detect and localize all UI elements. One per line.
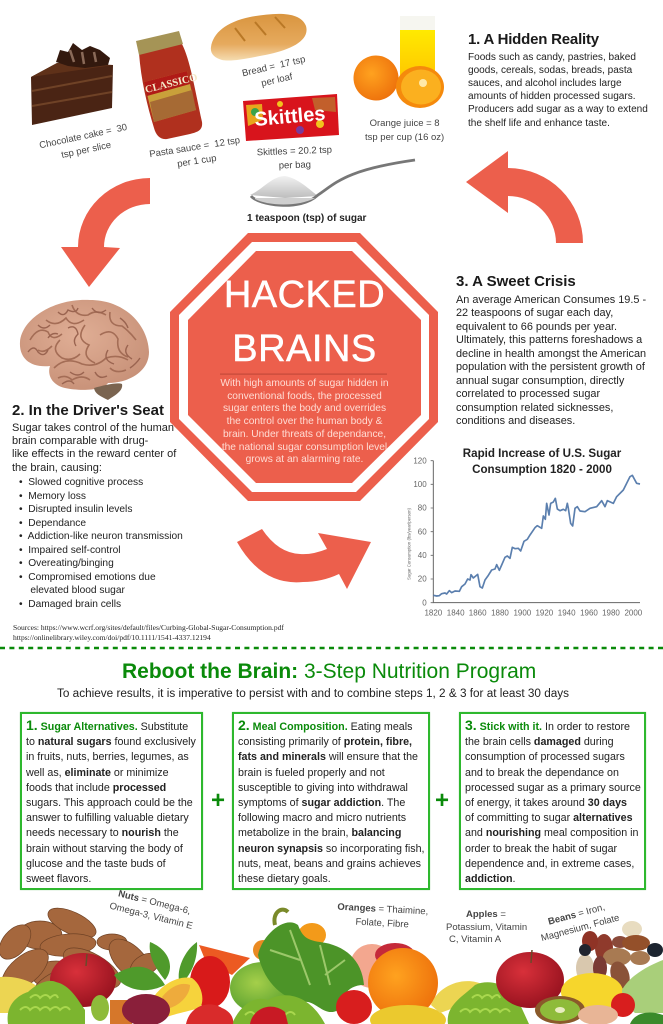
body 1: Producers add sugar as a way to extend: [468, 104, 648, 115]
heading 2: 2. In the Driver's Seat: [12, 402, 164, 419]
food image: orange juice and oranges: [354, 16, 444, 108]
line chart: US sugar consumption: 1980: [602, 609, 620, 618]
bullet list: • Compromised emotions due: [19, 572, 156, 583]
food image: skittles bag: [243, 94, 339, 141]
bullet list: • Damaged brain cells: [19, 599, 121, 610]
step 1 text: brain without starving the body of: [26, 843, 183, 855]
food: tomato: [336, 990, 372, 1024]
nutrient label: nuts: Nuts = Omega-6,: [117, 888, 192, 917]
divider: dashed green line: [0, 647, 663, 649]
bullet list: [19, 477, 183, 610]
food: almonds: [0, 902, 164, 1008]
step 3 text: consumption of processed sugars: [465, 751, 625, 763]
section 2: in the driver's seat: [12, 402, 183, 610]
step 1 text: needs necessary to nourish the: [26, 827, 179, 839]
step 3 text: addiction.: [465, 873, 515, 885]
food collage: bottom strip: [0, 902, 663, 1024]
step 3 text: [465, 717, 641, 885]
title: hacked brains: [224, 274, 385, 370]
food: red apple left: [50, 953, 116, 1007]
food: strawberry: [186, 1004, 233, 1024]
line chart: US sugar consumption: 60: [418, 527, 427, 536]
line chart: US sugar consumption: 120: [413, 456, 427, 465]
food: red tomato pepper: [190, 956, 230, 1008]
food: lettuce right: [448, 982, 529, 1024]
food: leafy greens: [258, 910, 364, 1012]
body 2: Sugar takes control of the human: [12, 422, 174, 434]
nutrient label: apples: Apples =: [466, 909, 506, 920]
step 1 text: sugars. This approach could be the: [26, 797, 193, 809]
step box 3: [459, 712, 646, 890]
step 1 text: answer to fulfilling valuable dietary: [26, 812, 189, 824]
section 1: a hidden reality: [468, 31, 648, 129]
step 1 text: foods that include processed: [26, 782, 166, 794]
step 3 text: 3. Stick with it. In order to restore: [465, 717, 630, 733]
step 1 text: glucose and the taste buds of: [26, 858, 166, 870]
food: big orange: [368, 948, 438, 1018]
section 3: a sweet crisis: [456, 273, 646, 427]
step 3 text: of energy, it takes around 30 days: [465, 797, 627, 809]
food: beans: [576, 921, 663, 991]
step box 2: [232, 712, 430, 890]
food: red onion: [122, 994, 170, 1024]
step 2 text: metabolize in the brain, balancing: [238, 827, 401, 839]
step 2 text: fats and minerals will ensure that the: [238, 751, 418, 763]
body 3: correlated to processed sugar: [456, 388, 600, 400]
body 3: population with the persistent growth of: [456, 361, 645, 373]
food: lettuce left: [8, 981, 85, 1024]
food: banana left: [0, 977, 42, 1013]
nutrient label: oranges: Oranges = Thaimine,: [337, 902, 429, 917]
title: hacked brains: HACKED: [224, 274, 385, 316]
food label: orange juice: [365, 118, 444, 142]
body 1: amounts of hidden processed sugars.: [468, 91, 636, 102]
stop sign description: conventional foods, the processed: [227, 391, 382, 402]
step 2 text: 2. Meal Composition. Eating meals: [238, 717, 412, 733]
step 2 text: following macro and micro nutrients: [238, 812, 406, 824]
food: lemon wedge: [152, 977, 202, 1018]
bullet list: • Dependance: [19, 518, 86, 529]
body 3: annual sugar consumption, directly: [456, 375, 624, 387]
body 3: An average American Consumes 19.5 -: [456, 294, 646, 306]
body 2: [12, 422, 176, 474]
food: lemon right: [561, 973, 623, 1011]
step 2 text: these dietary goals.: [238, 873, 331, 885]
stop sign description: sugar enters the body and overrides: [223, 403, 386, 414]
food: pepper red: [250, 1007, 288, 1024]
food: green apple: [230, 962, 296, 1014]
line chart: US sugar consumption: 2000: [624, 609, 643, 618]
food: basil leaves: [114, 942, 197, 990]
line chart: US sugar consumption: 1880: [491, 609, 509, 618]
body 3: equivalent to 66 pounds per year.: [456, 321, 617, 333]
food: cabbage: [622, 960, 663, 1013]
step 2 text: neuron synapsis so incorporating fish,: [238, 843, 425, 855]
stop sign octagon: [170, 233, 438, 501]
body 2: the brain, causing:: [12, 462, 102, 474]
arrow: top right curved left: [466, 151, 583, 243]
plus sign 2: +: [435, 787, 449, 814]
food label: bread: Bread = 17 tsp: [241, 54, 307, 79]
body 2: like effects in the reward center of: [12, 448, 176, 460]
step 2 text: consisting primarily of protein, fibre,: [238, 736, 412, 748]
food image: pasta sauce jar: CLASSICO: [144, 72, 199, 96]
line chart: US sugar consumption: 20: [418, 575, 427, 584]
food label: pasta sauce: Pasta sauce = 12 tsp: [149, 135, 241, 160]
step 2 text: brain is fueled properly and not: [238, 767, 385, 779]
food image: bread loaf: [211, 14, 307, 61]
line chart: US sugar consumption: 80: [418, 504, 427, 513]
line chart: US sugar consumption: 1820: [424, 609, 443, 618]
step 1 text: [26, 717, 196, 885]
body 2: brain comparable with drug-: [12, 435, 148, 447]
line chart: US sugar consumption: 0: [422, 598, 427, 607]
food label: orange juice: Orange juice = 8: [370, 118, 440, 129]
nutrient label: apples: [446, 909, 527, 945]
step box 1: [20, 712, 203, 890]
stop sign description: the national sugar consumption level: [222, 442, 387, 453]
line chart: US sugar consumption: 1900: [513, 609, 532, 618]
food: banana right: [431, 981, 484, 1013]
food image: teaspoon of sugar: [250, 160, 415, 205]
nutrient label: apples: Potassium, Vitamin: [446, 922, 527, 933]
chart title: Rapid Increase of U.S. Sugar: [463, 447, 621, 460]
arrow: top left curved down: [61, 178, 150, 287]
subheading: To achieve results, it is imperative to persist with and to combine steps 1, 2 & 3 for at least 30 days: [57, 687, 569, 700]
body 1: the shelf life and enhance taste.: [468, 118, 610, 129]
nutrient label: beans: Magnesium, Folate: [540, 912, 621, 944]
body 3: decline in health amongst the American: [456, 348, 646, 360]
body 3: conditions and diseases.: [456, 415, 575, 427]
nutrient label: apples: C, Vitamin A: [449, 934, 501, 945]
food: orange slice piece: [110, 1000, 132, 1024]
food image: pasta sauce jar: [136, 31, 202, 139]
bullet list: • Impaired self-control: [19, 545, 121, 556]
step 1 text: 1. Sugar Alternatives. Substitute: [26, 717, 188, 733]
heading: reboot the brain: Reboot the Brain: 3-Step Nutrition Program: [122, 660, 536, 683]
step 1 text: sweet flavors.: [26, 873, 91, 885]
title: hacked brains: BRAINS: [232, 328, 377, 370]
bullet list: elevated blood sugar: [30, 585, 125, 596]
body 1: Foods such as candy, pastries, baked: [468, 52, 636, 62]
food label: chocolate cake: tsp per slice: [60, 139, 112, 161]
line chart: US sugar consumption: 100: [413, 480, 427, 489]
nutrient label: nuts: Omega-3, Vitamin E: [108, 900, 194, 931]
step 1 text: well as, eliminate or minimize: [26, 767, 169, 779]
heading 3: 3. A Sweet Crisis: [456, 273, 576, 290]
step 2 text: [238, 717, 425, 885]
line chart: US sugar consumption: 1920: [535, 609, 554, 618]
step 3 text: the brain cells damaged during: [465, 736, 614, 748]
body 1: [468, 52, 648, 129]
step 3 text: processed sugar as a primary source: [465, 782, 641, 794]
food label: bread: per loaf: [260, 71, 293, 89]
line chart: US sugar consumption: Sugar Consumption (lbs/year/person): [407, 508, 412, 580]
bullet list: • Overeating/binging: [19, 558, 114, 569]
food label: skittles: [257, 145, 332, 171]
line chart: US sugar consumption: [407, 456, 643, 618]
bullet list: • Disrupted insulin levels: [19, 504, 132, 515]
brain illustration: [20, 300, 149, 400]
body 3: consumption related sicknesses,: [456, 402, 613, 414]
stop sign description: With high amounts of sugar hidden in: [220, 378, 389, 389]
sources: Sources: https://www.wcrf.org/sites/default/files/Curbing-Global-Sugar-Consumption.pdf: [13, 623, 284, 632]
stop sign description: [220, 378, 389, 465]
body 3: [456, 294, 646, 427]
line chart: US sugar consumption: 1860: [469, 609, 487, 618]
nutrient label: oranges: Folate, Fibre: [355, 916, 409, 930]
bullet list: • Slowed cognitive process: [19, 477, 143, 488]
food label: chocolate cake: Chocolate cake = 30: [38, 122, 128, 151]
step 3 text: and to break the dependance on: [465, 767, 619, 779]
step 2 text: susceptible to giving into withdrawal: [238, 782, 408, 794]
food: grapefruit and orange pepper: [199, 923, 415, 988]
plus sign 1: +: [211, 787, 225, 814]
food label: skittles: per bag: [279, 159, 311, 171]
food image: chocolate cake: [31, 43, 113, 125]
sources: https://onlinelibrary.wiley.com/doi/pdf/10.1111/1541-4337.12194: [13, 632, 211, 642]
stop sign description: the control over the human body &: [227, 416, 382, 427]
line chart: US sugar consumption: 40: [418, 551, 427, 560]
spoon caption: 1 teaspoon (tsp) of sugar: [247, 213, 366, 224]
arrow: bottom curved right: [237, 529, 371, 589]
body 1: goods, cereals, sodas, breads, pasta: [468, 65, 632, 76]
food label: pasta sauce: per 1 cup: [176, 152, 217, 169]
body 3: 22 teaspoons of sugar each day,: [456, 307, 613, 319]
line chart: US sugar consumption: 1960: [580, 609, 598, 618]
stop sign description: brain. Under threats of dependance,: [223, 429, 386, 440]
nutrient label: oranges: [337, 902, 429, 930]
chart title: [463, 447, 622, 476]
line chart: US sugar consumption: 1940: [558, 609, 576, 618]
step 3 text: of committing to sugar alternatives: [465, 812, 633, 824]
bullet list: • Memory loss: [19, 491, 86, 502]
step 3 text: dependence and, in extreme cases,: [465, 858, 634, 870]
body 1: sauces, and alcohol includes large: [468, 78, 622, 89]
food label: orange juice: tsp per cup (16 oz): [365, 132, 444, 142]
body 3: Ultimately, this patterns foreshadows a: [456, 334, 642, 346]
food: lettuce middle: [232, 995, 325, 1024]
step 3 text: order to break the habit of sugar: [465, 843, 617, 855]
stop sign description: grows at an alarming rate.: [246, 454, 363, 465]
food label: skittles: Skittles = 20.2 tsp: [257, 145, 332, 158]
food: red apple right: [496, 950, 564, 1008]
food: small tomato and onion: [91, 993, 663, 1024]
nutrient label: beans: Beans = Iron,: [547, 902, 606, 928]
heading 1: 1. A Hidden Reality: [468, 31, 599, 48]
step 1 text: in fruits, nuts, berries, legumes, as: [26, 751, 189, 763]
line chart: US sugar consumption: 1840: [447, 609, 465, 618]
chart title: Consumption 1820 - 2000: [472, 463, 612, 476]
step 3 text: and nourishing meal composition in: [465, 827, 638, 839]
food: mango: [370, 1005, 446, 1024]
step 1 text: to natural sugars found exclusively: [26, 736, 196, 748]
food image: skittles bag: Skittles: [254, 103, 326, 131]
step 2 text: nuts, meat, beans and grains achieves: [238, 858, 421, 870]
sources: [13, 623, 284, 642]
food: kiwi: [535, 996, 585, 1024]
bullet list: • Addiction-like neuron transmission: [19, 531, 183, 542]
step 2 text: symptoms of sugar addiction. The: [238, 797, 405, 809]
